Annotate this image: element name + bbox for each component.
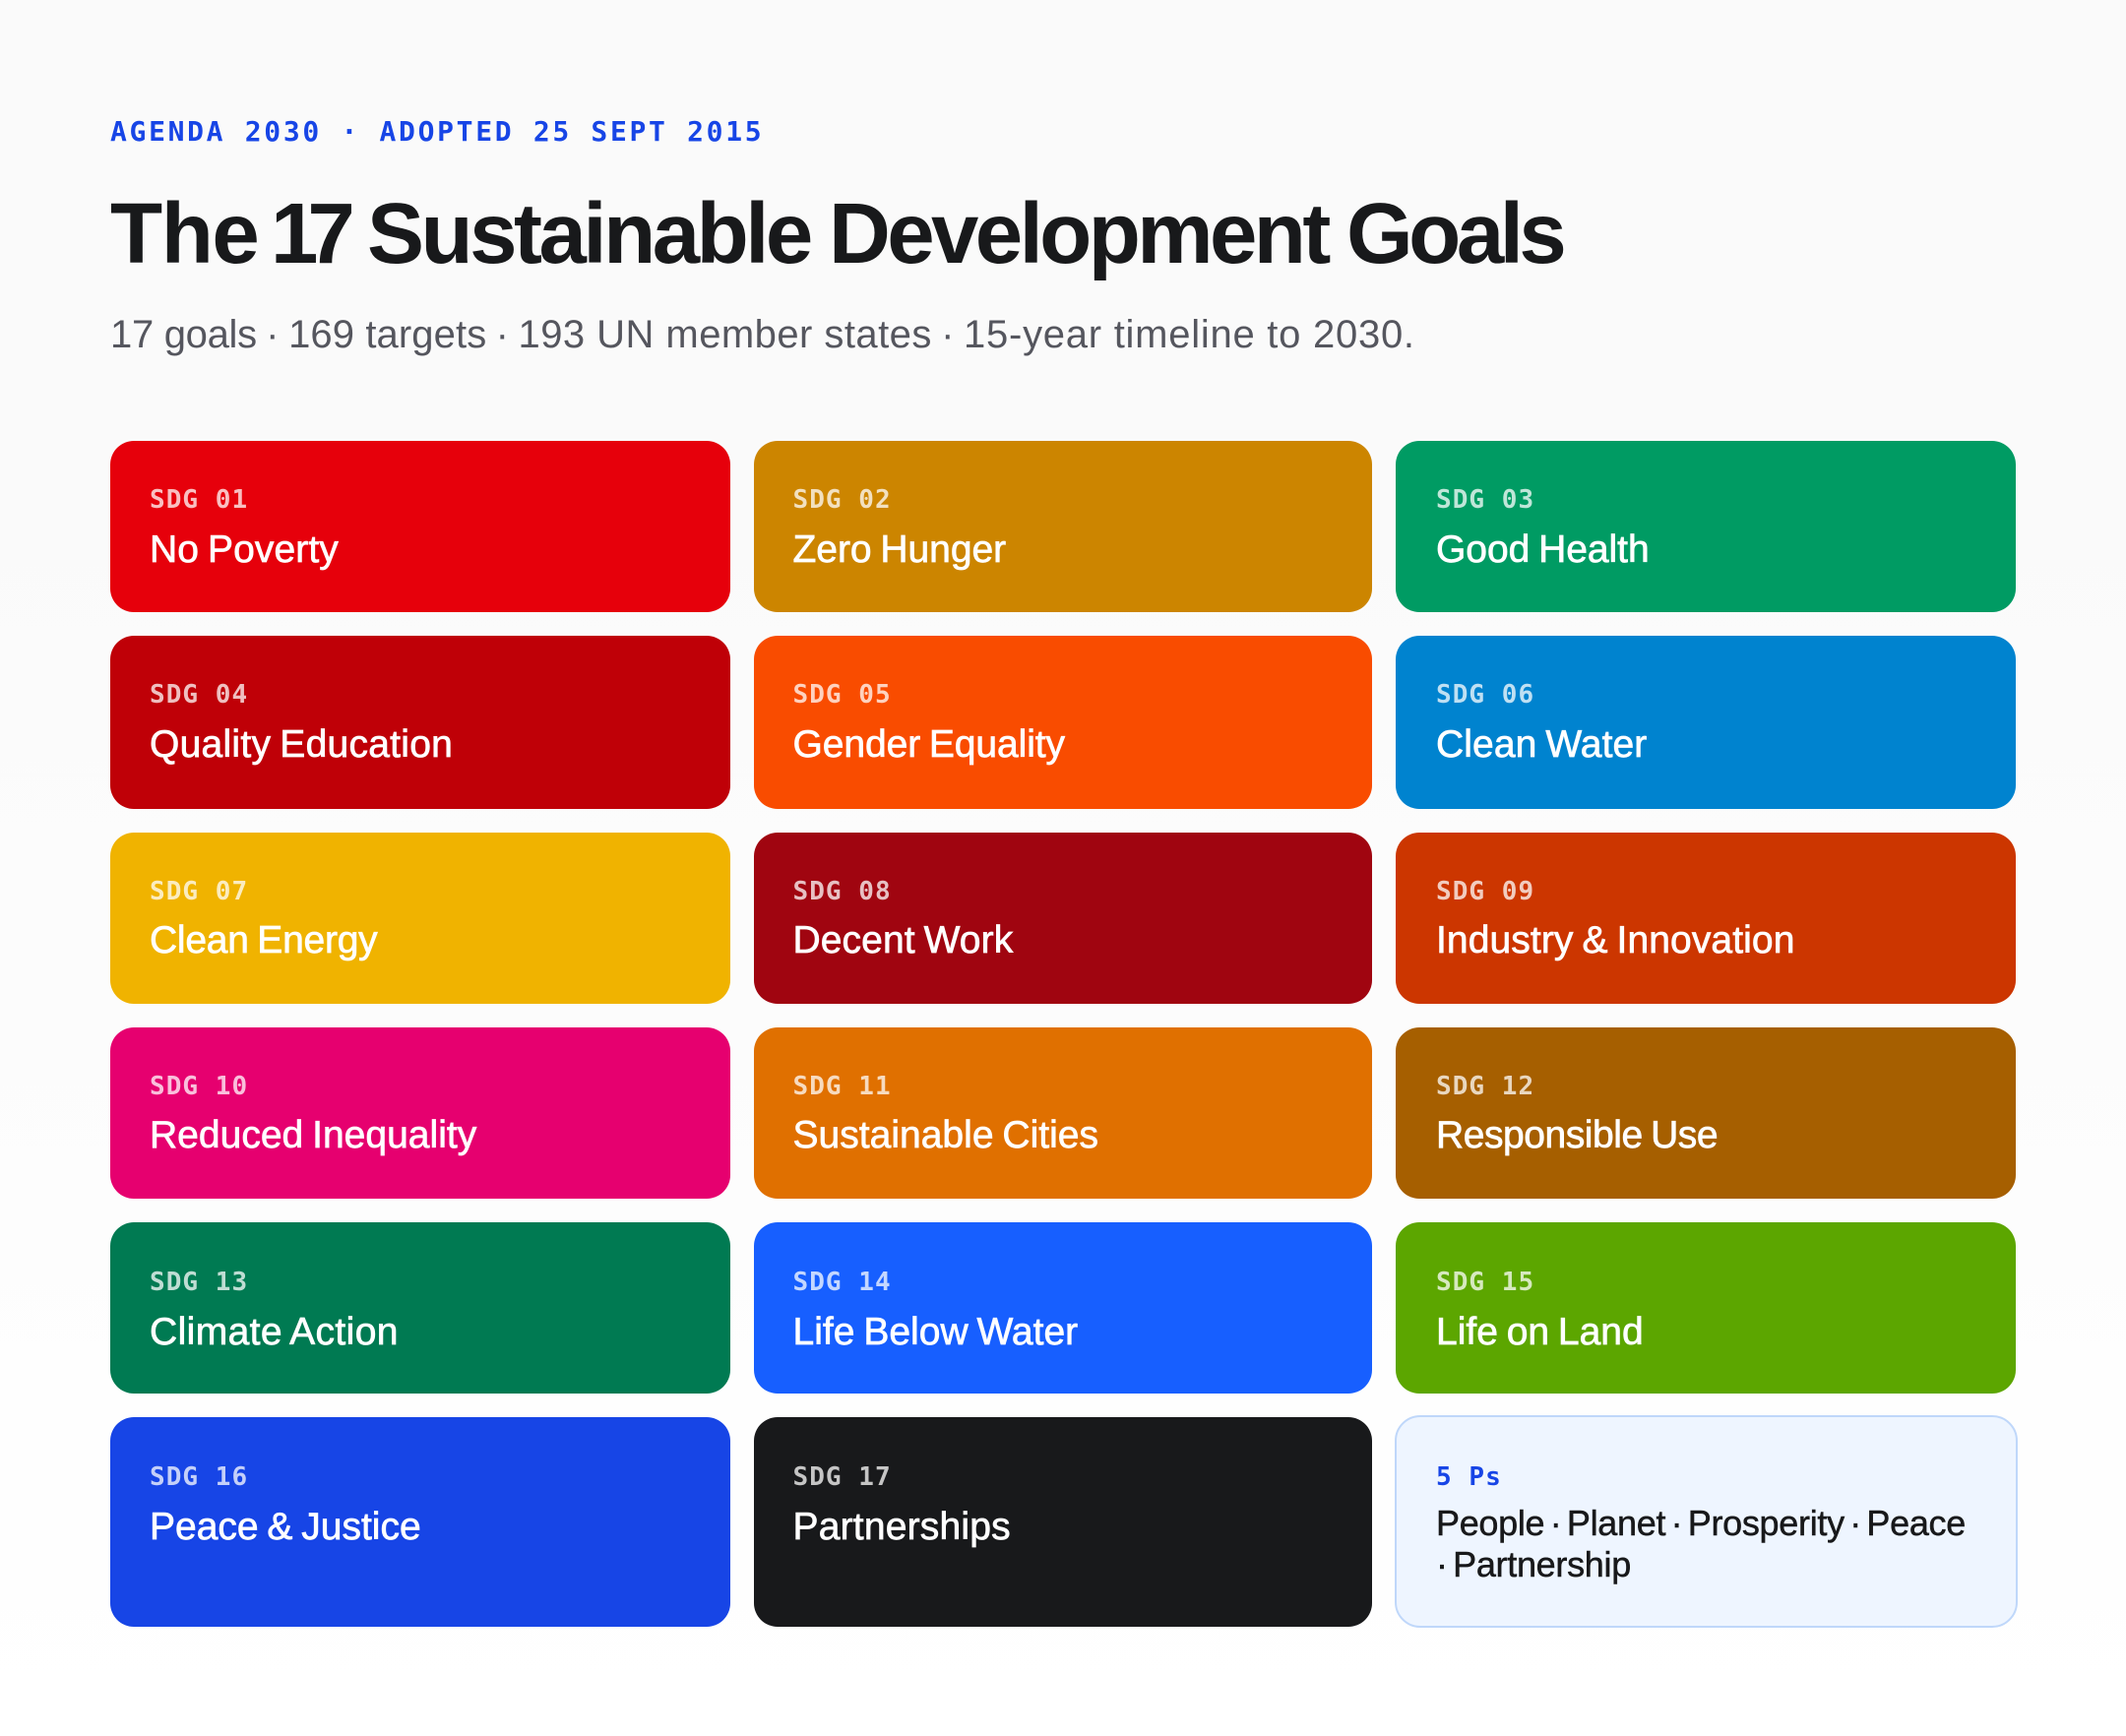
card: SDG 07 — [110, 833, 730, 1004]
card: SDG 11 — [754, 1027, 1372, 1199]
card: SDG 09 — [1396, 833, 2016, 1004]
title — [110, 186, 1563, 281]
title: Goals — [1346, 186, 1562, 281]
card: SDG 11: Sustainable Cities — [793, 1114, 1098, 1156]
card: SDG 02: SDG 02 — [793, 485, 892, 515]
title: 17 — [271, 186, 344, 281]
card: SDG 05 — [754, 636, 1372, 809]
card: SDG 03: Good Health — [1436, 528, 1650, 571]
card: SDG 03: SDG 03 — [1436, 485, 1534, 515]
card: SDG 05: SDG 05 — [793, 680, 892, 710]
card: SDG 11: SDG 11 — [793, 1072, 892, 1101]
title: Development — [829, 186, 1328, 281]
card: SDG 10 — [110, 1027, 730, 1199]
card: SDG 03 — [1396, 441, 2016, 612]
card: SDG 13: Climate Action — [150, 1311, 399, 1353]
card: SDG 07: SDG 07 — [150, 877, 248, 906]
card: SDG 09: SDG 09 — [1436, 877, 1534, 906]
subtitle: 17 goals · 169 targets · 193 UN member states · 15-year timeline to 2030. — [110, 313, 1415, 356]
card: SDG 17: Partnerships — [793, 1506, 1011, 1548]
card: SDG 04: SDG 04 — [150, 680, 248, 710]
card: SDG 14 — [754, 1222, 1372, 1394]
card: SDG 06 — [1396, 636, 2016, 809]
eyebrow label: AGENDA 2030 · ADOPTED 25 SEPT 2015 — [110, 115, 764, 148]
card: SDG 16 — [110, 1417, 730, 1627]
card: 5 Ps callout: People · Planet · Prosperity · Peace — [1436, 1502, 1966, 1543]
card: SDG 01 — [110, 441, 730, 612]
card: SDG 16: SDG 16 — [150, 1462, 248, 1492]
card: SDG 12 — [1396, 1027, 2016, 1199]
card: SDG 07: Clean Energy — [150, 919, 377, 961]
card: SDG 16: Peace & Justice — [150, 1506, 421, 1548]
title: The — [110, 186, 258, 281]
card: SDG 02: Zero Hunger — [793, 528, 1006, 571]
card: SDG 08 — [754, 833, 1372, 1004]
card: SDG 12: SDG 12 — [1436, 1072, 1534, 1101]
card: SDG 01: No Poverty — [150, 528, 339, 571]
card: SDG 10: SDG 10 — [150, 1072, 248, 1101]
card: SDG 08: Decent Work — [793, 919, 1013, 961]
card: SDG 15: SDG 15 — [1436, 1268, 1534, 1297]
card: SDG 17 — [754, 1417, 1372, 1627]
card: SDG 13: SDG 13 — [150, 1268, 248, 1297]
card: SDG 10: Reduced Inequality — [150, 1114, 476, 1156]
card: SDG 15: Life on Land — [1436, 1311, 1644, 1353]
card: SDG 06: Clean Water — [1436, 723, 1647, 766]
card: 5 Ps callout: 5 Ps — [1436, 1462, 1502, 1492]
card: SDG 15 — [1396, 1222, 2016, 1394]
card: SDG 12: Responsible Use — [1436, 1114, 1718, 1156]
card: SDG 04 — [110, 636, 730, 809]
card: SDG 14: SDG 14 — [793, 1268, 892, 1297]
card: SDG 06: SDG 06 — [1436, 680, 1534, 710]
card: SDG 14: Life Below Water — [793, 1311, 1078, 1353]
card: 5 Ps callout: · Partnership — [1436, 1543, 1631, 1584]
card: SDG 13 — [110, 1222, 730, 1394]
title: Sustainable — [367, 186, 810, 281]
card: SDG 08: SDG 08 — [793, 877, 892, 906]
card: 5 Ps callout — [1395, 1415, 2018, 1628]
card: SDG 01: SDG 01 — [150, 485, 248, 515]
card: SDG 02 — [754, 441, 1372, 612]
card: SDG 05: Gender Equality — [793, 723, 1065, 766]
card: SDG 09: Industry & Innovation — [1436, 919, 1795, 961]
card: SDG 04: Quality Education — [150, 723, 453, 766]
card: SDG 17: SDG 17 — [793, 1462, 892, 1492]
